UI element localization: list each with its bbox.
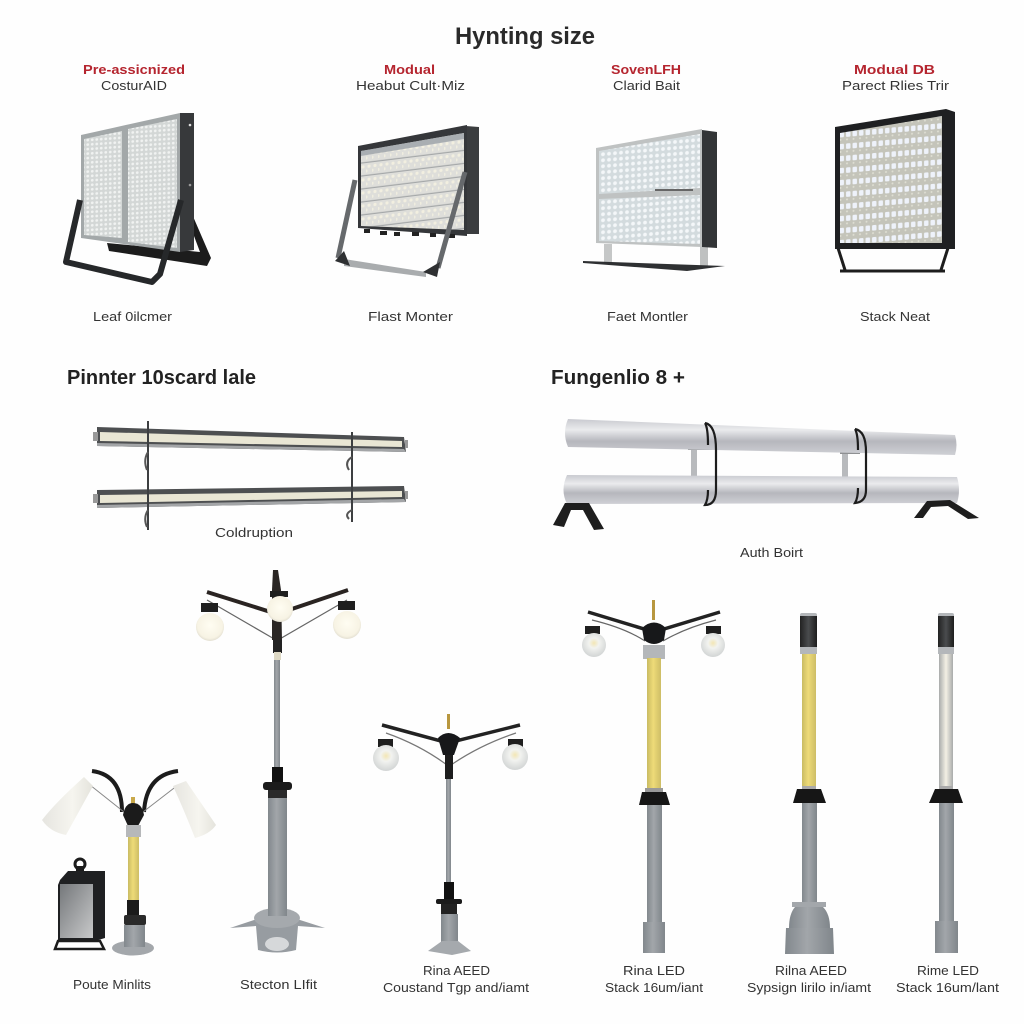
heading: flood light 2: Heabut Cult·Miz xyxy=(356,78,465,93)
panel: tube lights xyxy=(551,367,979,560)
caption: clear bollard lamp: Rime LED xyxy=(917,963,979,978)
caption: flood light 4: Stack Neat xyxy=(860,309,930,324)
caption: clear bollard lamp xyxy=(896,963,999,995)
caption: yellow bollard lamp: Sypsign lirilo in/iamt xyxy=(747,980,871,995)
panel: yellow bollard lamp xyxy=(747,613,871,995)
heading: flood light 3: SovenLFH xyxy=(611,62,681,77)
caption: flood light 3: Faet Montler xyxy=(607,309,689,324)
illustration: angled flood light xyxy=(335,125,479,277)
caption: clear bollard lamp: Stack 16um/lant xyxy=(896,980,999,995)
illustration: three-globe tall lamp xyxy=(196,570,361,952)
heading: flood light 3 xyxy=(611,62,681,93)
caption: yellow bollard lamp xyxy=(747,963,871,995)
caption: yellow-post globe lamp xyxy=(605,963,703,995)
panel: clear bollard lamp xyxy=(896,613,999,995)
caption: twin LED bars: Coldruption xyxy=(215,525,293,540)
illustration: clear bollard lamp xyxy=(929,613,963,953)
heading: tube lights: Fungenlio 8 + xyxy=(551,367,685,389)
illustration: twin aluminium tubes xyxy=(553,419,979,530)
heading: flood light 2: Modual xyxy=(384,62,435,77)
illustration: twin LED bars xyxy=(93,421,408,530)
caption: flood light 1: Leaf 0ilcmer xyxy=(93,309,173,324)
heading: flood light 3: Clarid Bait xyxy=(613,78,680,93)
heading: flood light 2 xyxy=(356,62,465,93)
illustration: yellow bollard lamp xyxy=(785,613,834,954)
illustration: twin cone lamp xyxy=(42,771,216,956)
panel: flood light 4 xyxy=(835,62,955,324)
illustration: two-globe small lamp xyxy=(373,714,528,955)
caption: twin aluminium tubes: Auth Boirt xyxy=(740,545,803,560)
caption: yellow-post globe lamp: Rina LED xyxy=(623,963,685,978)
caption: yellow-post globe lamp: Stack 16um/iant xyxy=(605,980,703,995)
illustration: twin-panel flood light xyxy=(66,113,211,282)
heading: linear lights: Pinnter 10scard lale xyxy=(67,367,256,389)
illustration: control box xyxy=(55,859,105,949)
caption: two-globe small lamp: Coustand Tgp and/iamt xyxy=(383,980,529,995)
panel: flood light 2 xyxy=(335,62,479,324)
caption: lamp with control box: Poute Minlits xyxy=(73,977,152,992)
panel: lamp with control box xyxy=(42,771,216,992)
panel: flood light 3 xyxy=(583,62,725,324)
panel: linear lights xyxy=(67,367,408,540)
heading: flood light 1 xyxy=(83,62,185,93)
caption: two-globe small lamp: Rina AEED xyxy=(423,963,490,978)
heading: flood light 4: Modual DB xyxy=(854,62,935,77)
heading: flood light 4 xyxy=(842,62,950,93)
illustration: stand-mounted flood light xyxy=(583,129,725,271)
heading: flood light 1: CosturAID xyxy=(101,78,167,93)
title: Hynting size xyxy=(455,23,595,50)
caption: three-globe tall lamp: Stecton LIfit xyxy=(240,977,317,992)
caption: flood light 2: Flast Monter xyxy=(368,309,454,324)
caption: two-globe small lamp xyxy=(383,963,529,995)
panel: three-globe tall lamp xyxy=(196,570,361,992)
illustration: yellow-post globe lamp xyxy=(582,600,725,953)
panel: two-globe small lamp xyxy=(373,714,529,995)
illustration: dense LED flood light xyxy=(835,109,955,271)
heading: flood light 1: Pre-assicnized xyxy=(83,62,185,77)
panel: yellow-post globe lamp xyxy=(582,600,725,995)
caption: yellow bollard lamp: Rilna AEED xyxy=(775,963,847,978)
heading: flood light 4: Parect Rlies Trir xyxy=(842,78,950,93)
panel: flood light 1 xyxy=(66,62,211,324)
